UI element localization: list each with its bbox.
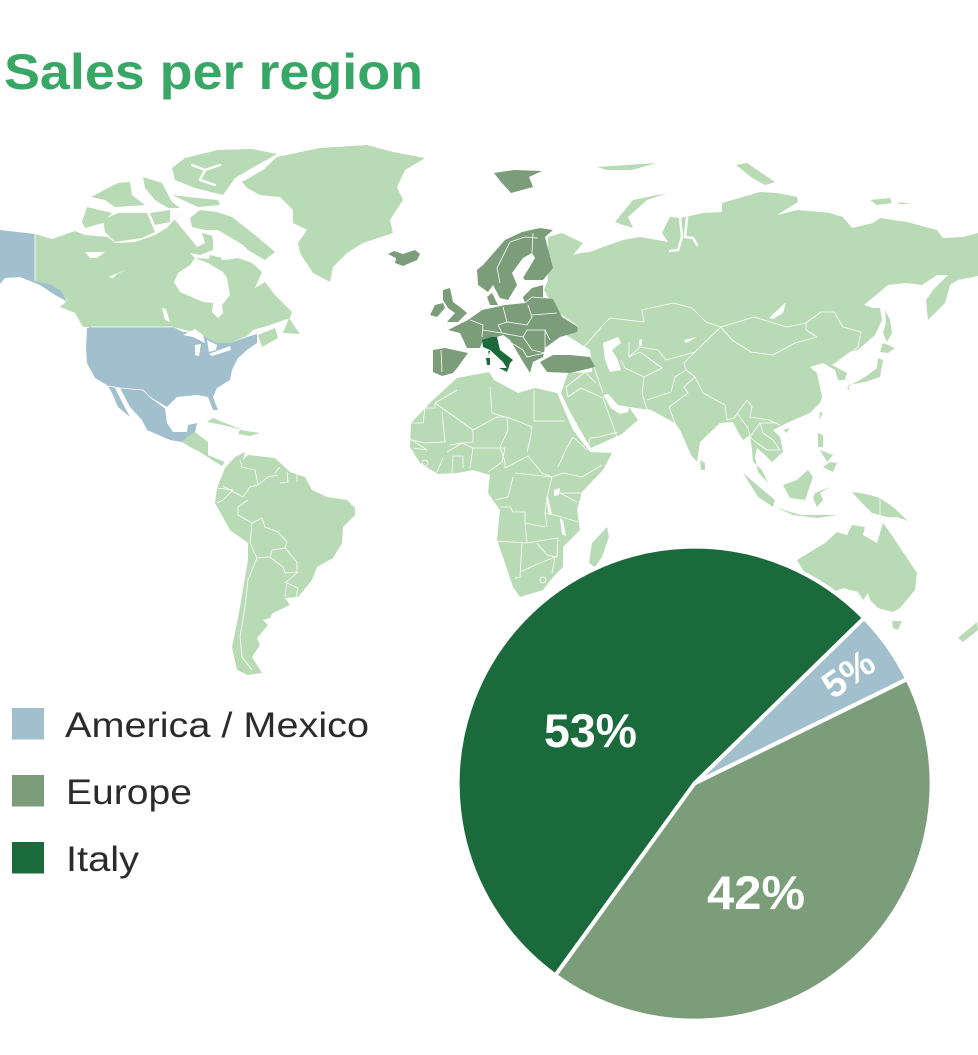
map: country borders <box>35 233 880 670</box>
legend item: Italy <box>12 840 140 879</box>
map: Italy <box>482 337 513 372</box>
pie label: 53%: 53% <box>544 704 637 757</box>
legend item: Italy: Italy <box>66 840 140 879</box>
pie slice: Italy 53% <box>458 547 864 975</box>
pie slice: America / Mexico 5% <box>694 618 907 784</box>
map: European countries <box>388 170 595 376</box>
title: Sales per region <box>4 44 423 100</box>
legend item: Europe: Europe <box>66 773 192 812</box>
pie label: 5%: 5% <box>814 641 883 707</box>
pie label: 42%: 42% <box>707 866 805 919</box>
pie slice: Europe 42% <box>555 679 932 1021</box>
legend item: Europe <box>12 773 192 812</box>
world map <box>0 145 978 675</box>
map: rest of world land <box>35 145 978 675</box>
pie chart <box>458 547 932 1021</box>
map: USA and Mexico <box>0 230 257 442</box>
legend item: America / Mexico: America / Mexico <box>65 706 369 745</box>
legend <box>12 706 369 879</box>
map: inland water and channels <box>85 165 786 536</box>
